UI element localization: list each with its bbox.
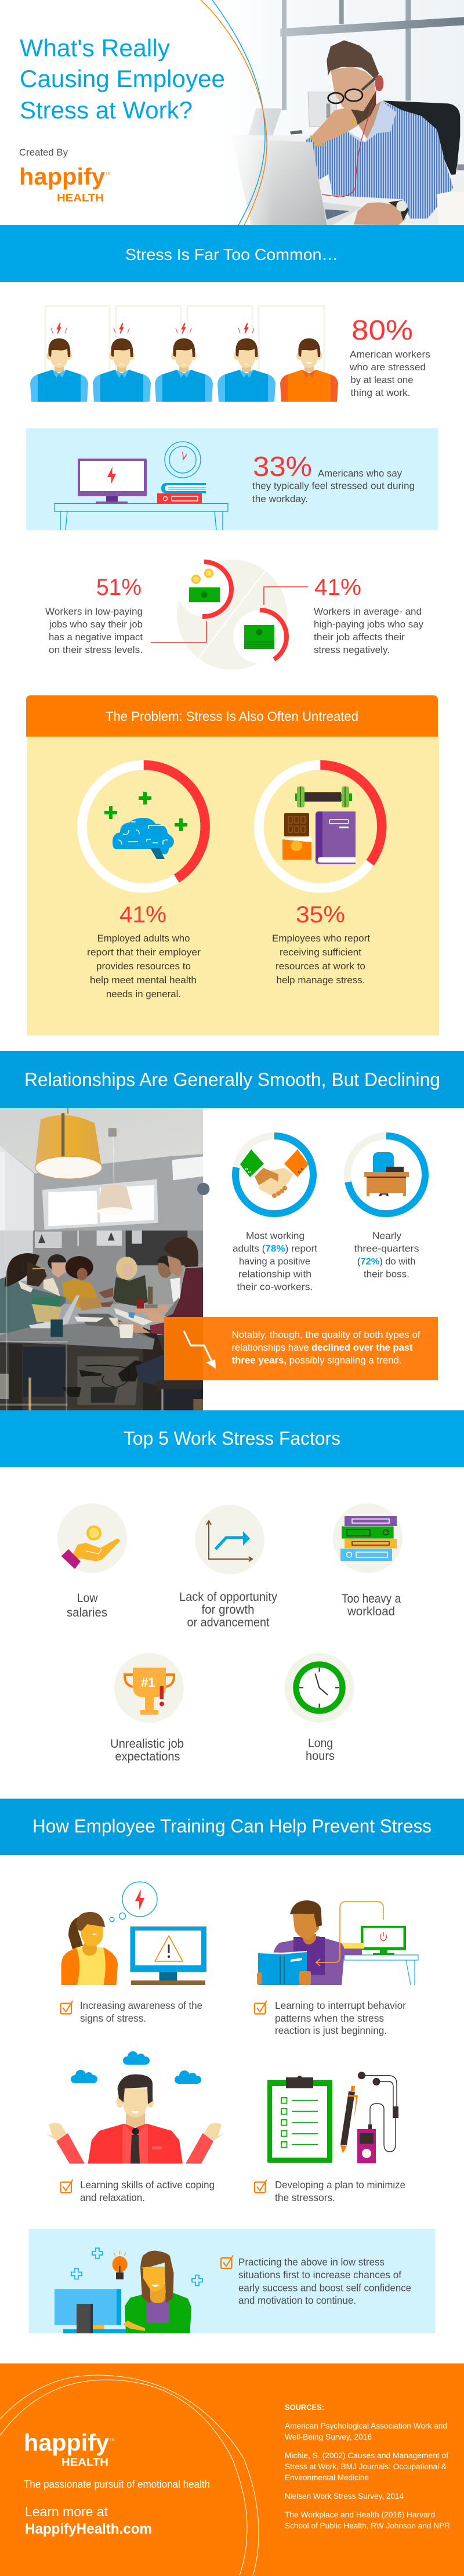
text: coping: and relaxation. [80,2192,145,2203]
panel: relationships [164,1136,438,1380]
label: salaries [67,1606,107,1619]
logo: happify health: happify [19,163,105,190]
sources: Well-Being Survey, 2016 [285,2433,372,2441]
created by: Created By [19,147,68,158]
section heading: relationships [0,1051,464,1108]
stat: 41 percent: 41% [314,575,361,600]
logo: happify health white: happify [24,2429,109,2456]
icon: checkbox [60,2180,73,2193]
factor: unrealistic expectations [110,1653,184,1763]
icon: checkbox [255,2001,267,2014]
text: practicing: Practicing the above in low stress [238,2256,385,2268]
icon: pen [340,2086,358,2153]
icon: boss desk [364,1152,409,1196]
icon: five workers [30,323,338,402]
text: americans who say [252,468,415,504]
factor: long hours [284,1653,354,1763]
tagline: The passionate pursuit of emotional health [24,2478,210,2490]
panel: hero [19,0,464,226]
text: low-paying jobs: on their stress levels. [49,644,143,655]
text: americans who say: Americans who say [318,468,402,479]
text: average and high-paying jobs [314,606,423,655]
text: co-workers: adults (78%) report [233,1243,317,1254]
sources: Nielsen Work Stress Survey, 2014 [285,2492,404,2501]
call to action: HappifyHealth.com [25,2521,152,2537]
icon: meditating man with clouds [45,2051,225,2164]
panel: 33 percent [26,428,438,530]
icon: clipboard checklist [267,2076,332,2163]
text: interrupt: patterns when the stress [275,2012,384,2024]
sources: School of Public Health, RW Johnson and NPR [285,2521,450,2530]
label: Low [77,1592,98,1605]
icon: clock [284,1653,354,1723]
stat: 51 percent: 51% [96,575,142,600]
sources: American Psychological Association Work and [285,2422,447,2430]
text: boss: three-quarters [354,1243,419,1254]
text: low-paying jobs: Workers in low-paying [45,606,143,617]
section heading: employee training: How Employee Training Can Help Prevent Stress [32,1816,432,1837]
text: awareness: Increasing awareness of the [80,2000,202,2011]
text: average and high-paying jobs: stress negatively. [314,644,390,655]
icon: trophy [114,1653,184,1723]
text: average and high-paying jobs: their job affects their [314,632,405,643]
sources: SOURCES: [285,2402,324,2412]
text: callout copy [232,1329,420,1366]
text: interrupt: reaction is just beginning. [275,2025,387,2036]
title: What's Really [20,34,170,62]
text: co-workers: their co-workers. [237,1282,313,1292]
label: Lack of opportunity [179,1590,277,1604]
label [179,1590,277,1629]
footer [0,2364,464,2576]
text: callout copy: Notably, though, the quality of both types of [232,1329,420,1340]
label [67,1592,107,1619]
text: callout copy: three years, possibly signaling a trend. [232,1355,401,1366]
text: employees who report: Employees who report [272,933,370,944]
label: Long [308,1737,333,1750]
sources: The Workplace and Health (2016) Harvard [285,2510,435,2519]
text: employees who report: help manage stress. [276,975,365,986]
label: workload [347,1605,395,1618]
arrow: downward trend [184,1331,216,1369]
stat: 35 percent resources: 35% [296,902,345,928]
label: expectations [115,1750,180,1763]
label [306,1737,335,1763]
label: Unrealistic job [110,1737,184,1751]
stat: 41 percent employers: 41% [119,902,166,928]
training: stressor plan [255,2072,405,2203]
text: american workers: who are stressed [349,362,426,373]
text: practicing [238,2256,411,2306]
section heading: top 5 [0,1410,464,1467]
heading: the problem: The Problem: Stress Is Also Often Untreated [106,709,358,724]
section heading: stress is far too common: Stress Is Far Too Common… [125,246,338,264]
text: practicing: early success and boost self confidence [238,2282,411,2294]
section heading: relationships: Relationships Are Generally Smooth, But Declining [24,1069,440,1090]
label [342,1592,401,1618]
training: interrupt behavior [255,1900,418,2036]
icon: checkbox [221,2256,233,2268]
factor: heavy workload [333,1503,403,1618]
logo: happify health: TM [106,172,111,176]
text: employees who report: resources at work to [276,961,365,972]
text: employed adults: Employed adults who [97,933,190,944]
text: american workers: by at least one [350,374,413,385]
icon: desk with monitor, clock and books [55,442,228,530]
text: low-paying jobs [45,606,143,655]
icon: checkbox [60,2001,73,2014]
text: employed adults: report that their employer [87,947,201,958]
label: or advancement [187,1616,270,1629]
logo: happify health white [24,2429,115,2468]
icon: woman thinking at warning monitor [61,1882,206,1985]
ring chart: 78 percent [235,1136,313,1214]
text: american workers: thing at work. [350,387,411,398]
text: average and high-paying jobs: high-paying jobs who say [314,619,423,630]
text: employed adults: provides resources to [96,961,191,972]
text: plan [275,2179,405,2203]
icon: brain with plus signs [104,792,187,859]
logo: happify health [19,163,111,204]
stat: 80 percent: 80% [351,315,413,346]
text: boss: (72%) do with [357,1256,415,1267]
icon: checkbox [255,2180,267,2193]
text: employed adults: help meet mental health [90,975,197,986]
logo: happify health: HEALTH [57,192,104,204]
icon: hand with coin [57,1503,127,1573]
icon: dumbbell, chocolate and book [282,786,356,864]
text: callout copy: relationships have declined over the past [232,1342,413,1353]
text: plan: the stressors. [275,2192,335,2203]
factor: low salaries [57,1503,127,1619]
text: average and high-paying jobs: Workers in average- and [314,606,422,617]
panel: practice in low stress [29,2229,435,2333]
text: employees who report [272,933,370,986]
icon: stack of books [333,1503,403,1573]
photo: stressed man at laptop [191,0,464,226]
section heading: stress is far too common [0,225,464,282]
text: plan: Developing a plan to minimize [275,2179,405,2191]
icon: growth chart [195,1505,264,1574]
training: awareness [60,1882,206,2024]
text: co-workers: relationship with [238,1269,311,1279]
icon: trophy: #1 [141,1675,155,1690]
decorative arcs [201,0,267,225]
sources: Michie, S. (2002) Causes and Management of [285,2451,448,2460]
text: awareness: signs of stress. [80,2012,146,2024]
text: american workers: American workers [350,349,430,360]
text: co-workers: having a positive [239,1256,310,1267]
logo: happify health white: HEALTH [61,2456,108,2468]
text: awareness [80,2000,202,2024]
title: Stress at Work? [20,96,193,124]
text: american workers [349,349,430,398]
icon: handshake [240,1149,309,1198]
callout: declining trend [164,1317,438,1380]
sources: Environmental Medicine [285,2473,369,2482]
text: boss [354,1231,419,1279]
text: interrupt [275,2000,406,2036]
label: Too heavy a [342,1592,401,1606]
decorative footer arcs [0,2375,259,2575]
panel: pay and stress [45,560,423,670]
text: practicing: and motivation to continue. [238,2294,356,2306]
icon: split money circle [177,560,287,670]
text: practicing: situations first to increase chances of [238,2269,401,2281]
text: low-paying jobs: jobs who say their job [49,619,143,630]
row of office doors [45,306,324,390]
text: americans who say: the workday. [252,493,308,504]
text: boss: Nearly [372,1231,402,1241]
title: Causing Employee [20,65,225,92]
icon: woman with idea at computer [55,2248,202,2333]
text: employed adults: needs in general. [106,988,181,1000]
text: coping: Learning skills of active coping [80,2179,215,2191]
connector lines [151,587,308,643]
section heading: employee training [0,1799,464,1855]
text: employed adults [87,933,201,1000]
photo: team meeting [0,1108,209,1410]
ring chart: 41 percent [82,765,205,888]
title [20,34,225,124]
label: hours [306,1749,335,1763]
text: co-workers: Most working [246,1231,304,1241]
ring chart: 35 percent [259,765,382,888]
factor: lack of opportunity [179,1505,277,1629]
icon: man reading with power loop [257,1900,418,1985]
label [110,1737,184,1763]
text: employees who report: receiving sufficient [280,947,361,958]
call to action: Learn more at [25,2504,108,2519]
text: coping [80,2179,215,2203]
section heading: top 5: Top 5 Work Stress Factors [124,1428,340,1449]
text: boss: their boss. [364,1269,409,1279]
heading: the problem [26,695,438,737]
text: low-paying jobs: has a negative impact [49,632,143,643]
text: americans who say: they typically feel stressed out during [252,481,415,491]
sources: Stress at Work, BMJ Journals: Occupational & [285,2462,447,2471]
text: interrupt: Learning to interrupt behavior [275,2000,406,2011]
ring chart: 72 percent [347,1136,425,1214]
label: for growth [202,1603,254,1617]
call to action [25,2504,152,2537]
panel: the problem [26,695,439,1036]
stat: 33 percent: 33% [253,452,312,482]
sources [285,2402,450,2530]
logo: happify health white: TM [110,2438,115,2442]
training: active coping [45,2051,225,2203]
text: co-workers [233,1231,317,1292]
panel: 80 percent [30,306,430,402]
icon: music player with earphones [357,2072,398,2163]
